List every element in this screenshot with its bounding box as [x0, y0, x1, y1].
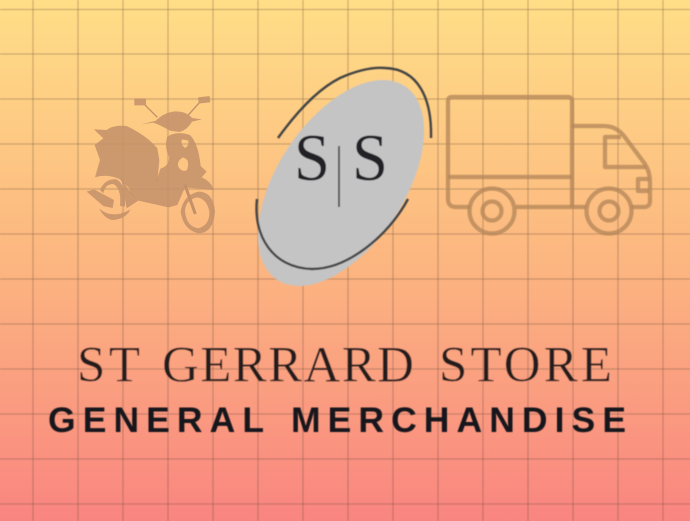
title: store name: [77, 338, 612, 394]
icon: scooter: [87, 96, 215, 233]
icon: delivery truck: [448, 97, 650, 234]
logo: left letter S: S: [294, 121, 330, 195]
subtitle: general merchandise: GENERAL: [48, 400, 264, 440]
logo: bottom arc: [256, 199, 408, 269]
logo: right letter S: S: [352, 121, 388, 195]
logo: grey ellipse: [224, 51, 458, 315]
logo: divider: [338, 146, 340, 207]
subtitle: general merchandise: MERCHANDISE: [291, 400, 626, 440]
title: store name: ST: [77, 338, 140, 394]
title: store name: GERRARD: [162, 338, 414, 394]
logo: S|S badge: [224, 51, 458, 315]
logo: top arc: [278, 68, 431, 138]
title: store name: STORE: [439, 338, 612, 394]
subtitle: general merchandise: [48, 400, 626, 440]
